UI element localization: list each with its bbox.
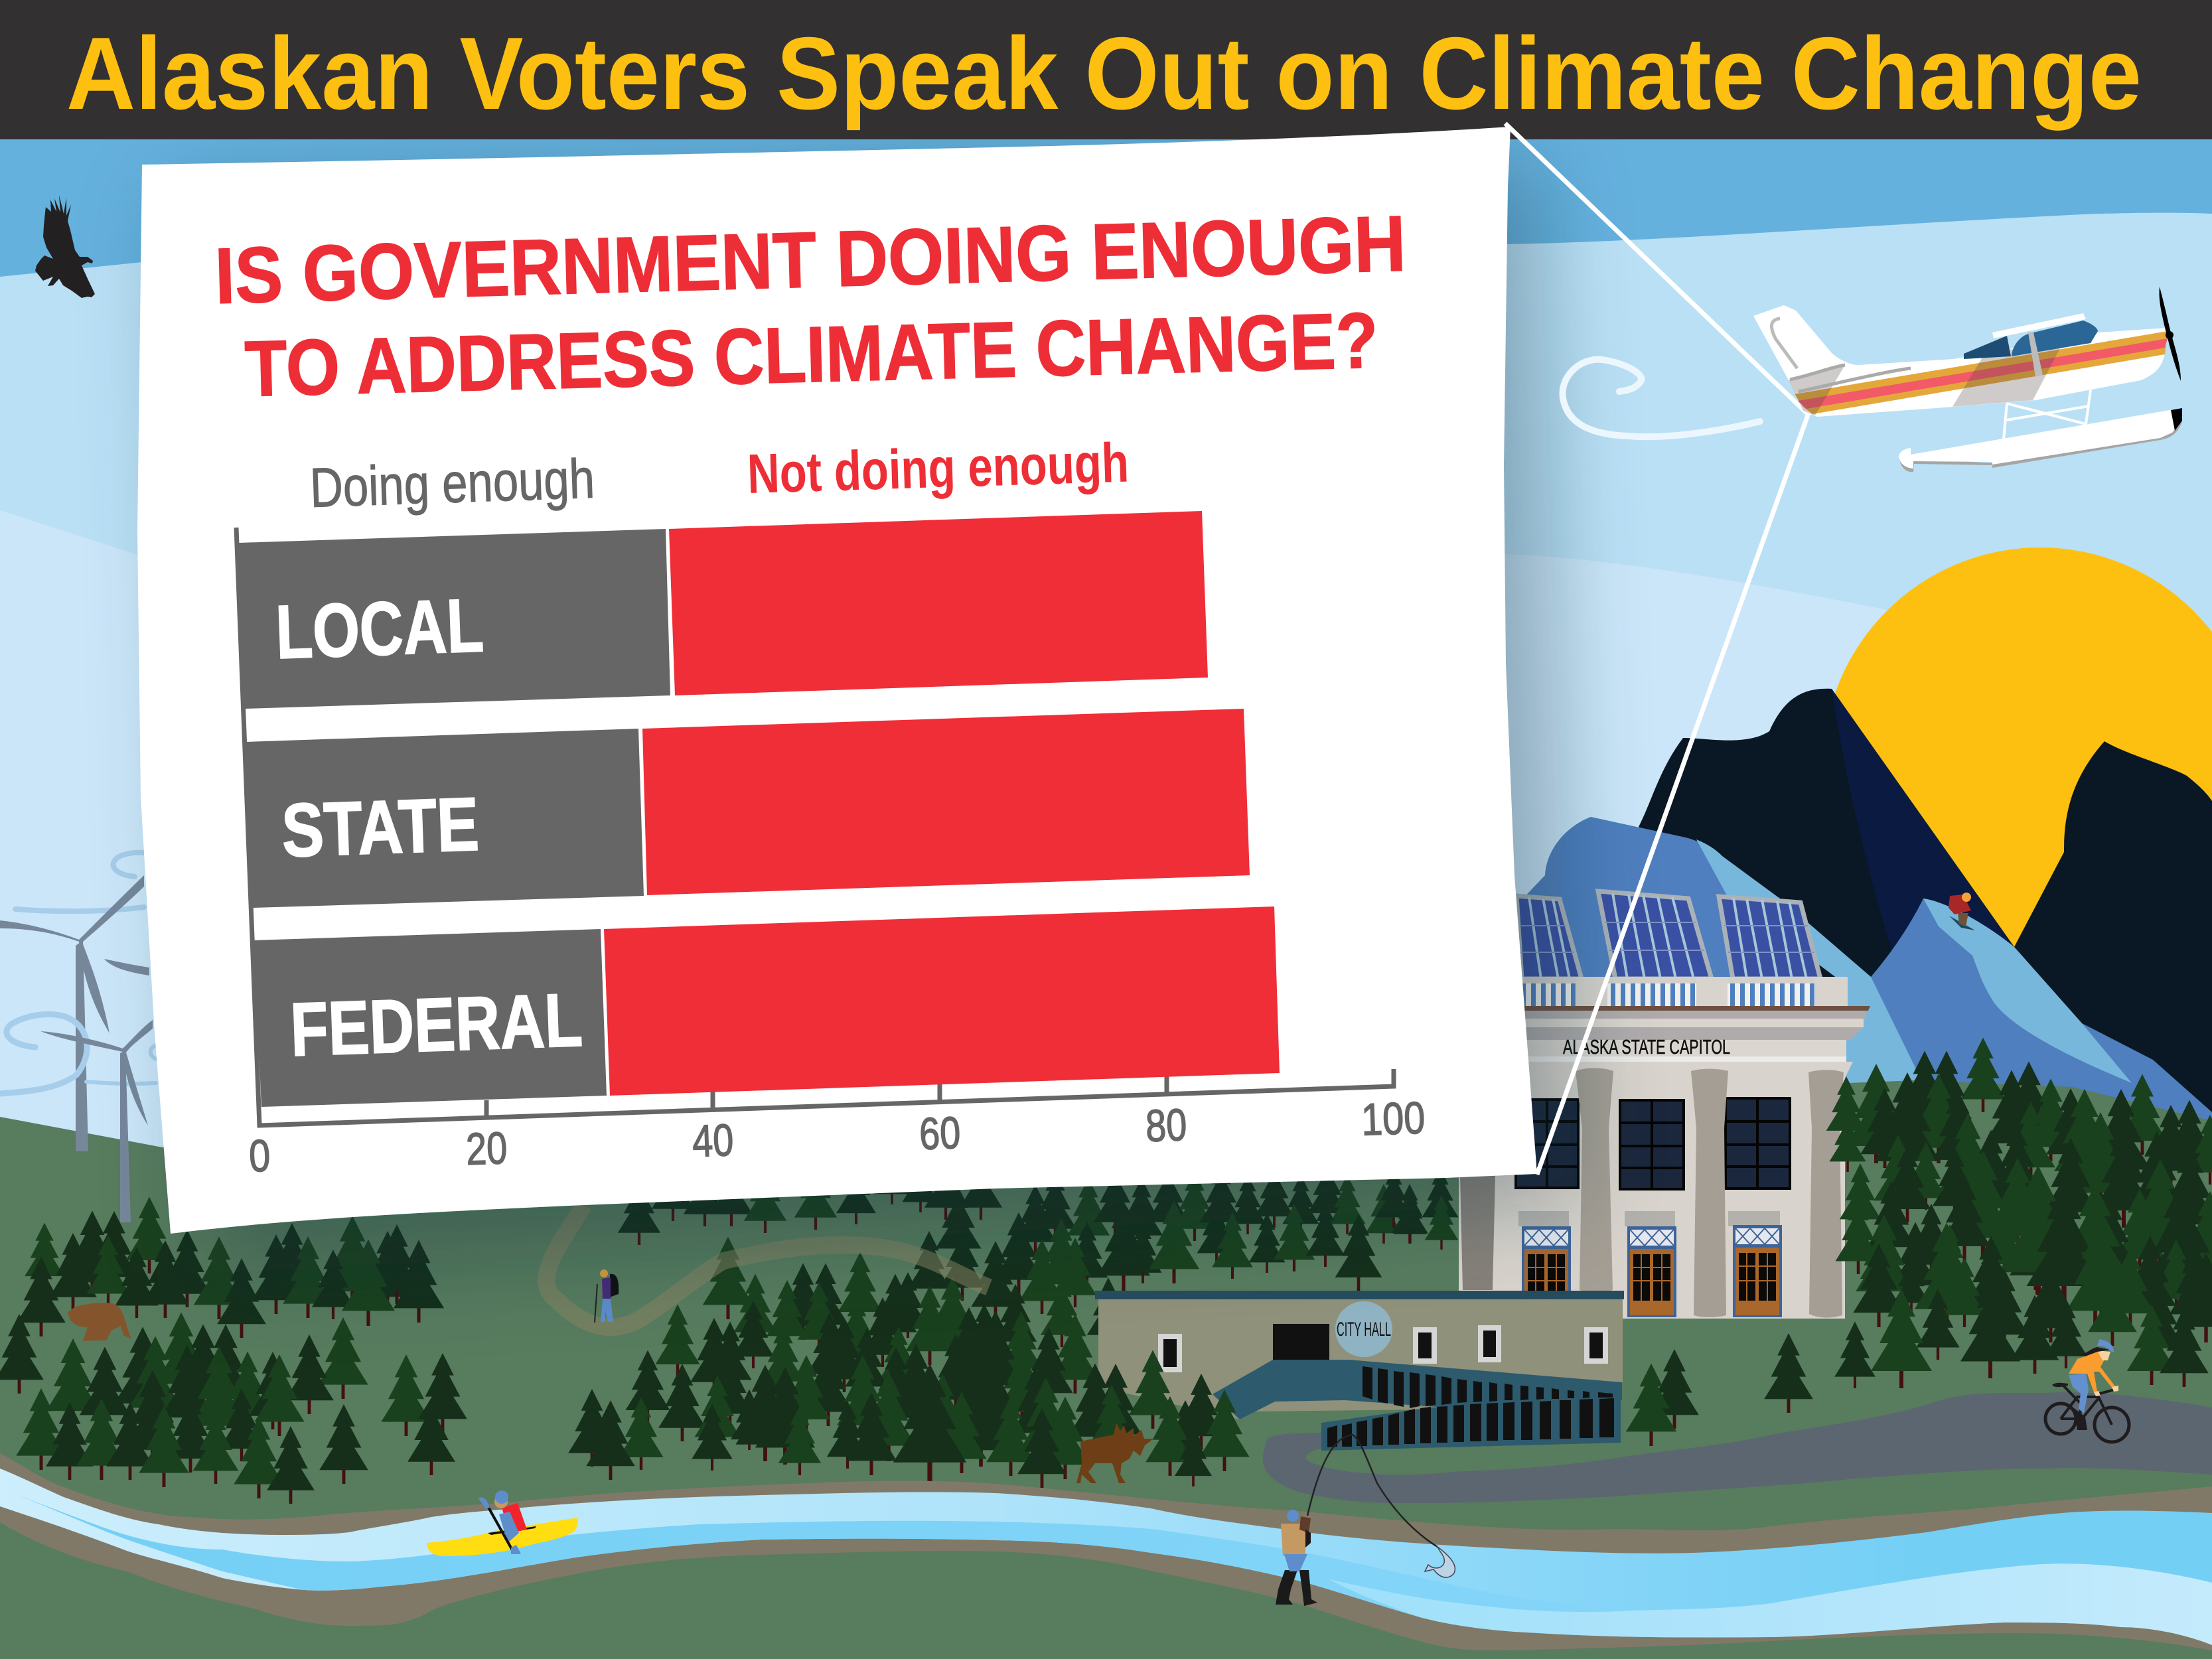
- orange stripe: [1795, 331, 2168, 414]
- float: [1899, 408, 2182, 472]
- wing shadows: [1789, 336, 2067, 415]
- mountains: [1507, 689, 2212, 1168]
- bear: [68, 1303, 131, 1341]
- legend label: doing enough: Doing enough: [309, 447, 595, 519]
- trees: back rows: [0, 1145, 1459, 1504]
- sun: [1823, 547, 2212, 981]
- bar: state: [246, 709, 1250, 908]
- hidden turbine blade: [104, 959, 149, 975]
- axis numbers: 0: [248, 1130, 271, 1182]
- chart question heading: IS GOVERNMENT DOING ENOUGH: [214, 200, 1407, 321]
- poster sheet: [137, 127, 1537, 1234]
- red stripe: [1798, 338, 2168, 409]
- turbine 1: [0, 875, 144, 1151]
- building body: [1459, 1062, 1845, 1319]
- wing: [1992, 313, 2086, 338]
- bar: local: LOCAL: [274, 583, 485, 675]
- eagle: [35, 195, 95, 298]
- hiking trail: [546, 1205, 989, 1327]
- skier on mountain: [1949, 893, 1975, 930]
- deep water channel: [7, 1491, 1632, 1618]
- axis numbers: 20: [465, 1123, 508, 1175]
- columns: [1460, 1068, 1844, 1318]
- fuselage: [1753, 305, 2168, 417]
- ramps and stairs: [1213, 1360, 1622, 1451]
- ground: [0, 1080, 2212, 1659]
- upper river bank: [0, 1453, 2212, 1659]
- lower light water band: [1329, 1563, 2212, 1645]
- cornice: [1520, 1006, 1870, 1080]
- city hall: [1095, 1291, 1624, 1451]
- windows: [1516, 1098, 1790, 1189]
- kayaker: [427, 1490, 578, 1556]
- water: [0, 1469, 2212, 1645]
- wind turbines: [0, 853, 156, 1222]
- axis numbers: 100: [1361, 1092, 1426, 1145]
- wind swirl upper: [15, 853, 144, 911]
- bar: state: STATE: [280, 782, 480, 873]
- lower bank and south meadow: [0, 1522, 2212, 1659]
- windows: [1964, 336, 2011, 359]
- paper drop shadow: [169, 159, 1573, 1274]
- airplane: [1753, 287, 2182, 472]
- wind swirl lower: [0, 1014, 87, 1094]
- fisherman and fish: [1276, 1435, 1455, 1606]
- airplane tow banner lines: [1505, 123, 1809, 1175]
- bar: federal: [254, 906, 1280, 1107]
- city hall body: [1098, 1299, 1623, 1419]
- tail details: [1771, 319, 1797, 368]
- chart question heading: [214, 200, 1407, 413]
- river: [0, 1453, 2212, 1659]
- legend label: not doing enough: Not doing enough: [747, 431, 1130, 505]
- bar: federal: FEDERAL: [289, 978, 584, 1072]
- doors: [1518, 1211, 1782, 1317]
- fish: [1425, 1547, 1455, 1577]
- white poster panel: [137, 127, 1537, 1234]
- city hall sign: CITY HALL: [1337, 1319, 1391, 1340]
- capitol lettering: ALASKA STATE CAPITOL: [1563, 1035, 1730, 1058]
- bar chart: [236, 511, 1426, 1182]
- fishing rod and line: [1307, 1435, 1438, 1547]
- moose: [1076, 1423, 1153, 1483]
- axis numbers: [248, 1092, 1426, 1182]
- solar panels: [1516, 891, 1820, 979]
- state capitol building: [1459, 891, 1870, 1319]
- chart question heading: TO ADDRESS CLIMATE CHANGE?: [244, 297, 1379, 413]
- cyclist: [2045, 1339, 2129, 1442]
- trees: right of capitol: [1764, 1038, 2212, 1413]
- chart axes: [236, 528, 1394, 1125]
- city hall sign: [1335, 1301, 1392, 1357]
- wing strut: [2028, 332, 2043, 377]
- bar: local: [239, 511, 1208, 709]
- hiker: [595, 1269, 619, 1323]
- wind swirl by plane: [1563, 360, 1760, 437]
- turbine 2: [40, 1020, 153, 1222]
- road: [1263, 1392, 2212, 1503]
- trees: foreground of city hall: [986, 1349, 1699, 1488]
- axis numbers: 40: [692, 1115, 735, 1167]
- axis numbers: 60: [919, 1108, 962, 1159]
- balustrade: [1522, 977, 1848, 1007]
- propeller: [2159, 287, 2181, 381]
- city hall windows: [1161, 1328, 1605, 1370]
- axis numbers: 80: [1145, 1100, 1188, 1151]
- city hall entrance: [1273, 1324, 1329, 1360]
- city hall roof: [1095, 1291, 1624, 1299]
- float struts: [2004, 390, 2091, 439]
